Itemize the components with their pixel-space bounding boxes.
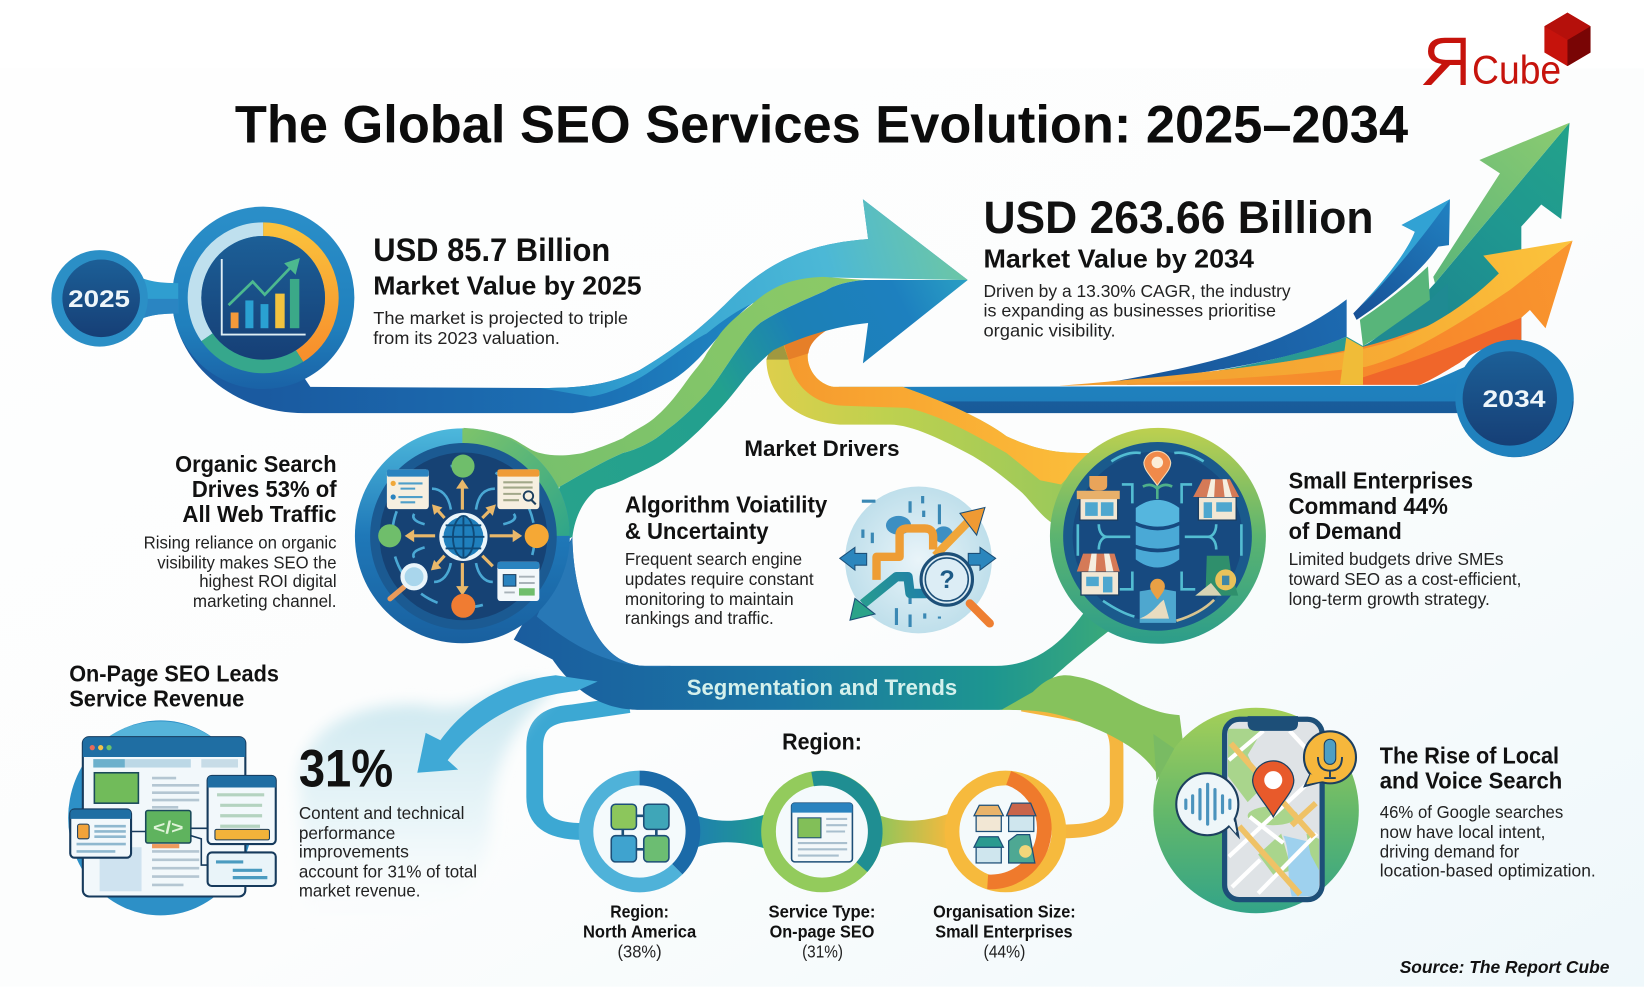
green falling line [863, 577, 927, 604]
text: organic search: marketing channel. [193, 591, 337, 611]
doc: top right [497, 469, 539, 509]
arrow to 31% [417, 675, 598, 773]
magnifier: ? [939, 566, 955, 594]
code box [146, 811, 191, 843]
label: organisation size: Organisation Size: [933, 901, 1076, 921]
text: 2034 market value: is expanding as businesses prioritise [983, 301, 1276, 321]
orange stream from arrow to right circle [766, 329, 1111, 524]
magnifier [390, 565, 426, 599]
text: local and voice search: The Rise of Local [1380, 742, 1559, 768]
text: 31 percent: improvements [299, 842, 409, 862]
ribbon to 2034 [839, 340, 1574, 457]
orange zigzag [877, 528, 933, 580]
text: small enterprises: toward SEO as a cost-efficient, [1289, 569, 1521, 589]
heading: region: Region: [782, 729, 862, 755]
small left window [70, 809, 131, 858]
pin [1253, 761, 1294, 817]
database icon [1135, 499, 1180, 568]
text: 31 percent: account for 31% of total [299, 862, 477, 882]
logo [1423, 13, 1591, 92]
text: 2034 market value: Market Value by 2034 [983, 243, 1254, 273]
label: region: North America [583, 921, 697, 941]
connector lines [1078, 453, 1241, 617]
on-page SEO illustration [68, 720, 276, 915]
ring segments [195, 229, 263, 337]
segment circle: region [586, 778, 693, 885]
text: organic search: visibility makes SEO the [157, 552, 337, 572]
orange arrow [1059, 241, 1573, 386]
left circle: organic search [355, 428, 570, 643]
text: organic search [144, 451, 337, 611]
segmentation bar with stems [514, 537, 1111, 710]
text: algorithm volatility: Algorithm Voiatility [625, 492, 827, 518]
text: local and voice search: and Voice Search [1380, 767, 1562, 793]
text: 31 percent: Content and technical [299, 803, 464, 823]
text: on-page SEO heading: On-Page SEO Leads [69, 661, 279, 687]
segment circle: organisation size [952, 778, 1059, 885]
2025 node [51, 250, 178, 347]
label: service type: Service Type: [769, 901, 875, 921]
magnifier [921, 554, 990, 623]
nodes [451, 455, 475, 478]
globe [441, 515, 485, 559]
2034 node: 2034 [1483, 386, 1546, 413]
green band to phone [1001, 675, 1190, 797]
voice bubble [1304, 731, 1356, 786]
text: small enterprises: of Demand [1289, 518, 1402, 544]
shop: top right [1193, 479, 1239, 520]
map [1228, 729, 1319, 896]
text: 31 percent: performance [299, 823, 395, 843]
pin [1143, 451, 1172, 499]
text: algorithm volatility: & Uncertainty [625, 518, 769, 544]
text: on-page SEO heading [69, 661, 279, 712]
text: 2025 market value: USD 85.7 Billion [373, 232, 610, 268]
bottom map tile [1140, 579, 1176, 623]
label: region: Region: [610, 901, 669, 921]
light band [540, 199, 968, 397]
blue arrow [1353, 199, 1450, 320]
doc: bottom right [497, 562, 539, 601]
text: 2025 market value: Market Value by 2025 [373, 271, 642, 301]
double arrows [840, 547, 867, 570]
code box: </> [153, 818, 183, 838]
heading: segmentation and trends: Segmentation and Trends [687, 675, 957, 700]
text: algorithm volatility: Frequent search engine [625, 549, 802, 569]
text: algorithm volatility: updates require constant [625, 569, 814, 589]
main arrow ribbon from 2025 [172, 199, 968, 556]
text: 31 percent [299, 740, 477, 900]
green arrow [1363, 123, 1570, 357]
text: on-page SEO heading: Service Revenue [69, 686, 244, 712]
volatility icon [840, 487, 996, 633]
text: 2034 market value: USD 263.66 Billion [983, 192, 1373, 243]
text: 2025 market value [373, 232, 642, 348]
text: local and voice search: driving demand for [1380, 842, 1519, 862]
label: service type: On-page SEO [770, 921, 874, 941]
teal and blue core [535, 280, 968, 556]
2025 node: 2025 [68, 286, 130, 313]
text: local and voice search: now have local intent, [1380, 822, 1545, 842]
pale blob behind 31% [299, 682, 556, 923]
text: algorithm volatility: monitoring to maintain [625, 589, 794, 609]
upward growth arrows [1059, 123, 1573, 386]
dashed ring [392, 465, 535, 608]
bottom right money and lock [1195, 556, 1238, 596]
text: 31 percent: 31% [299, 740, 393, 798]
text: 2034 market value: organic visibility. [983, 321, 1116, 341]
label: organisation size: Small Enterprises [935, 921, 1073, 941]
main window [83, 737, 245, 896]
text: algorithm volatility [625, 492, 827, 628]
text: algorithm volatility: rankings and traffic. [625, 608, 774, 628]
text: 2025 market value: from its 2023 valuation. [373, 328, 560, 348]
shop: bottom left [1077, 554, 1120, 595]
right bottom window [208, 852, 276, 886]
small curved arrows [413, 489, 515, 582]
text: organic search: All Web Traffic [182, 501, 337, 527]
text: small enterprises: long-term growth strategy. [1289, 589, 1490, 609]
chat bubble [1176, 773, 1238, 836]
label: service type: (31%) [802, 941, 843, 961]
chart icon [222, 258, 306, 335]
2034 node [1455, 340, 1573, 457]
text: 31 percent: market revenue. [299, 880, 420, 900]
big chart circle [172, 207, 354, 389]
heading: market drivers: Market Drivers [744, 436, 900, 461]
label: organisation size: (44%) [983, 941, 1025, 961]
label: service type [769, 901, 875, 961]
label: organisation size [933, 901, 1076, 961]
label: region: (38%) [618, 941, 662, 961]
text: small enterprises: Small Enterprises [1289, 468, 1473, 494]
text: local and voice search [1380, 742, 1596, 881]
title: The Global SEO Services Evolution: 2025–2034 [235, 97, 1408, 155]
label: region [583, 901, 697, 961]
radial arrows [411, 485, 516, 589]
right circle: small enterprises [1050, 428, 1266, 644]
text: 2034 market value: Driven by a 13.30% CAGR, the industry [983, 281, 1291, 301]
text: organic search: highest ROI digital [199, 571, 337, 591]
doc: top left [387, 469, 429, 509]
text: small enterprises: Command 44% [1289, 493, 1448, 519]
text: small enterprises: Limited budgets drive SMEs [1289, 549, 1504, 569]
text: organic search: Organic Search [175, 451, 337, 477]
shop: top left with cup [1077, 476, 1120, 520]
right top window [208, 776, 276, 844]
loop track with connectors [535, 705, 1117, 849]
text: small enterprises [1289, 468, 1521, 609]
segment circle: service type [769, 778, 875, 885]
text: 2025 market value: The market is projected to triple [373, 308, 628, 328]
green band [463, 277, 865, 524]
text: local and voice search: 46% of Google searches [1380, 802, 1563, 822]
text: 2034 market value [983, 192, 1373, 341]
text: organic search: Drives 53% of [192, 476, 337, 502]
source note: Source: The Report Cube [1400, 957, 1609, 977]
logo: Cube [1472, 48, 1561, 92]
text: local and voice search: location-based optimization. [1380, 861, 1596, 881]
text: organic search: Rising reliance on organic [144, 532, 337, 552]
phone illustration [1153, 708, 1359, 913]
